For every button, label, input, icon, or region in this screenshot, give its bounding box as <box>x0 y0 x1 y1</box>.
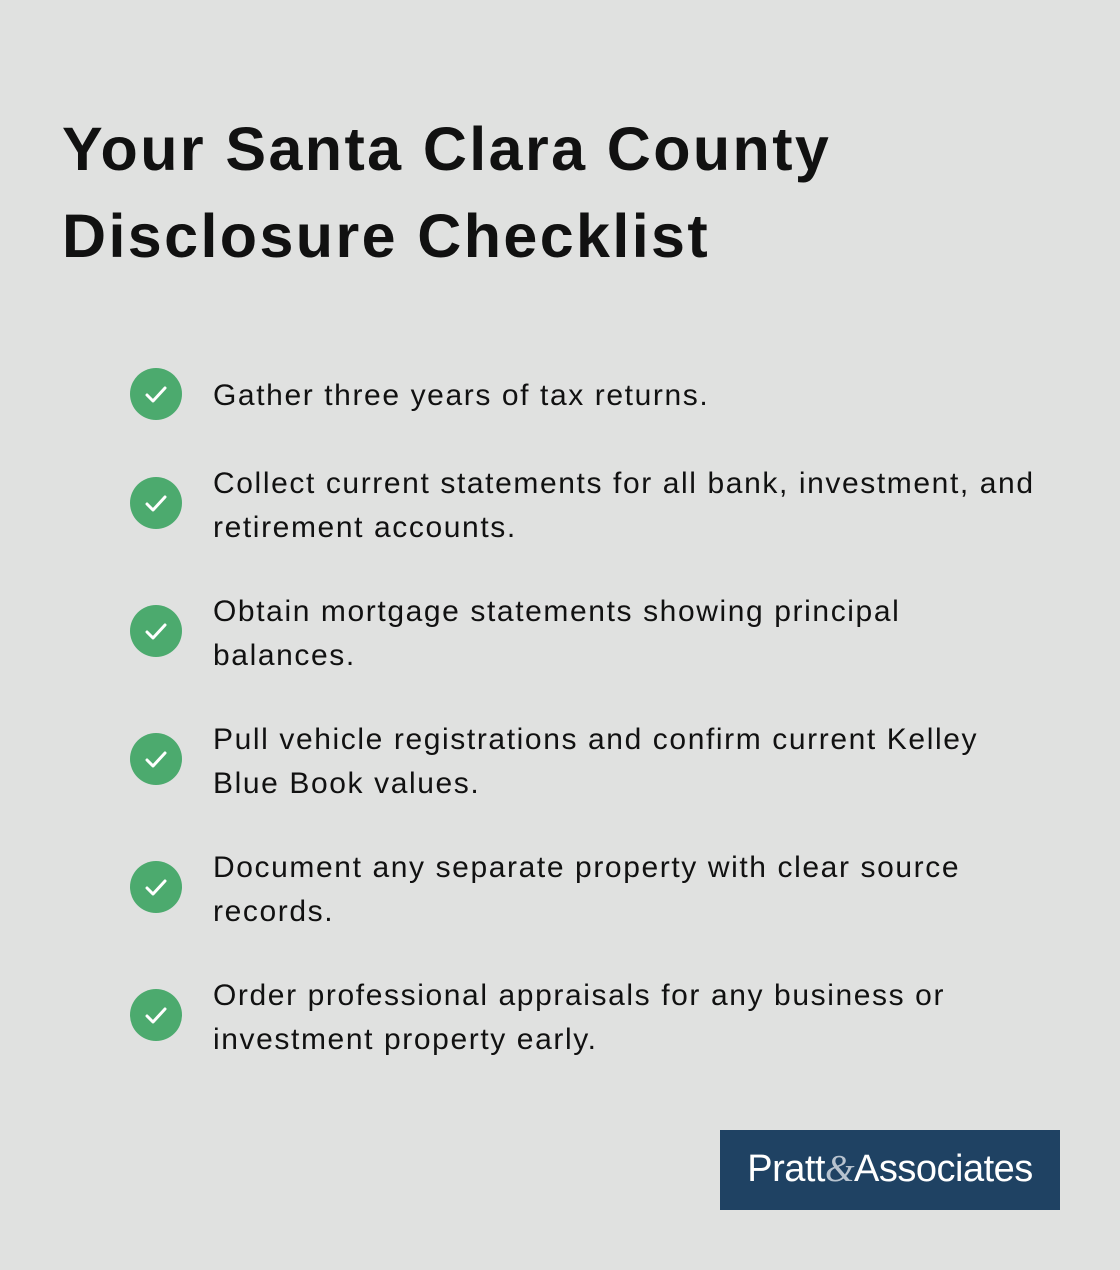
item 4 <box>130 723 978 800</box>
text: investment property early. <box>213 1023 598 1056</box>
text <box>213 723 978 800</box>
icon: check <box>130 477 182 529</box>
icon: check <box>130 989 182 1041</box>
text: Pull vehicle registrations and confirm current Kelley <box>213 723 978 756</box>
text: records. <box>213 895 334 928</box>
icon: check <box>130 605 182 657</box>
title: Your Santa Clara County <box>62 115 831 183</box>
item 3 <box>130 595 900 672</box>
text: Blue Book values. <box>213 767 480 800</box>
text: Collect current statements for all bank, investment, and <box>213 467 1035 500</box>
icon: check <box>130 733 182 785</box>
title: Disclosure Checklist <box>62 202 710 270</box>
logo <box>720 1130 1060 1210</box>
icon: check <box>130 368 182 420</box>
text <box>213 851 960 928</box>
item 2 <box>130 467 1035 544</box>
item 6 <box>130 979 945 1056</box>
text <box>213 467 1035 544</box>
text: balances. <box>213 639 356 672</box>
text <box>213 979 945 1056</box>
item 5 <box>130 851 960 928</box>
text: Document any separate property with clear source <box>213 851 960 884</box>
title <box>62 115 831 270</box>
text: Obtain mortgage statements showing principal <box>213 595 900 628</box>
text <box>213 595 900 672</box>
text: retirement accounts. <box>213 511 517 544</box>
item 1 <box>130 368 709 420</box>
icon: check <box>130 861 182 913</box>
text: Order professional appraisals for any business or <box>213 979 945 1012</box>
logo: Pratt&Associates <box>747 1148 1033 1190</box>
text: Gather three years of tax returns. <box>213 379 709 412</box>
